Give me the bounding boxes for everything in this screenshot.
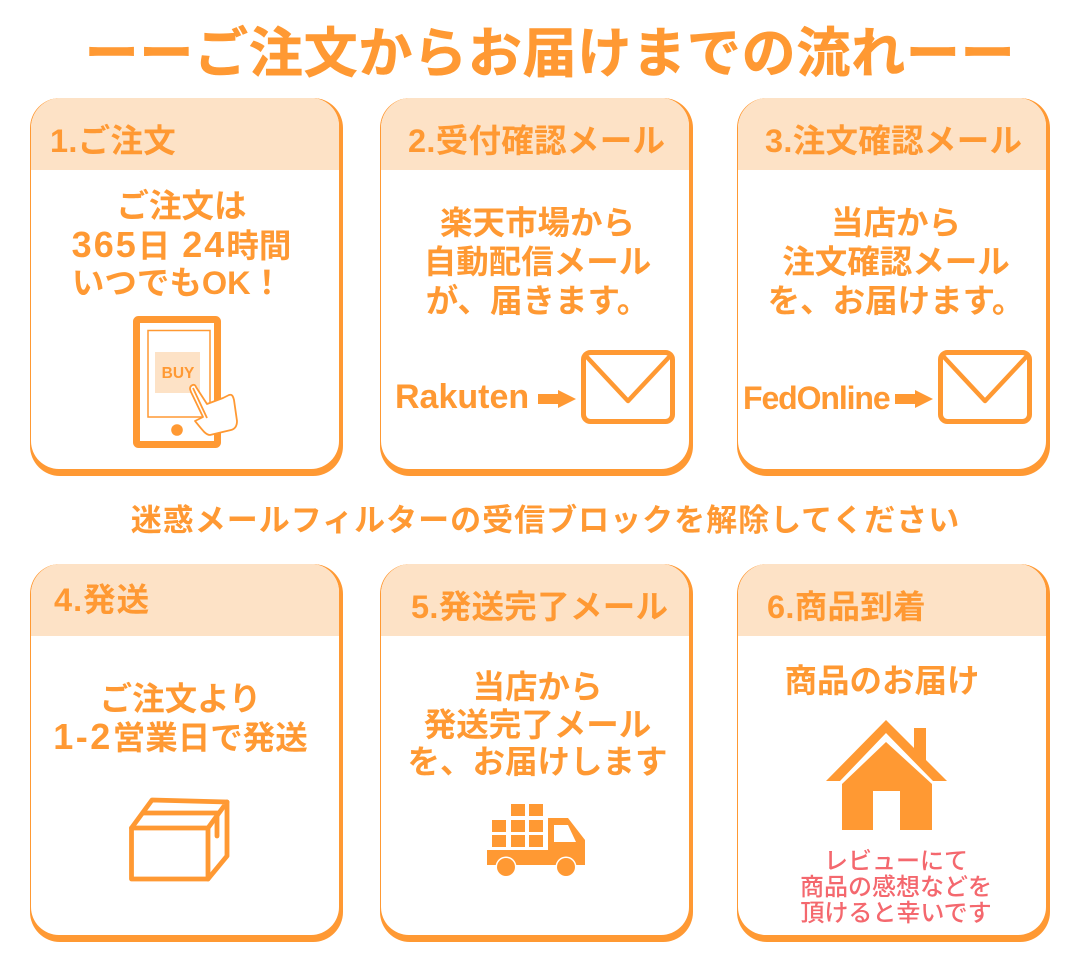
heading: step 3: 3.注文確認メール <box>765 123 1022 159</box>
text: order any time: いつでもOK！ <box>72 265 283 301</box>
text: review request: 商品の感想などを <box>800 874 992 901</box>
text: ships in 1-2 days: ご注文より <box>100 681 261 717</box>
text: shipment complete mail: 当店から <box>472 669 602 705</box>
icon: smartphone with hand: BUY <box>162 365 195 382</box>
text: order any time <box>72 188 291 301</box>
label: FedOnline: FedOnline <box>743 380 890 416</box>
title: ーーご注文からお届けまでの流れーー <box>85 24 1015 84</box>
text: review request: レビューにて <box>824 848 968 875</box>
icon: cardboard box <box>129 798 230 882</box>
notice: spam filter: 迷惑メールフィルターの受信ブロックを解除してください <box>131 503 960 538</box>
icon: smartphone with hand <box>133 316 238 448</box>
icon: house <box>826 720 947 830</box>
text: confirmation mail from shop <box>768 205 1024 319</box>
text: ships in 1-2 days <box>53 681 308 757</box>
arrow and envelope: FedOnline <box>895 350 1032 424</box>
text: automatic mail from Rakuten <box>424 205 651 319</box>
heading: step 6: 6.商品到着 <box>767 589 926 625</box>
panel: step 5 shipped mail <box>380 564 693 942</box>
text: review request: 頂けると幸いです <box>800 900 992 927</box>
panel: step 4 shipping <box>30 564 343 942</box>
panel: step 6 delivery <box>737 564 1050 942</box>
text: automatic mail from Rakuten: が、届きます。 <box>426 283 649 319</box>
text: automatic mail from Rakuten: 自動配信メール <box>424 244 651 280</box>
panel: step 2 receipt mail <box>380 98 693 476</box>
heading: step 2: 2.受付確認メール <box>408 123 665 159</box>
icon: delivery truck <box>487 804 585 876</box>
panel: step 3 order confirmation mail <box>737 98 1050 476</box>
heading: step 5: 5.発送完了メール <box>411 589 668 625</box>
text: shipment complete mail: 発送完了メール <box>424 706 651 742</box>
text: order any time: ご注文は <box>116 188 246 224</box>
text: shipment complete mail <box>407 669 668 780</box>
panel: step 1 order <box>30 98 343 476</box>
heading: step 1: 1.ご注文 <box>50 123 176 159</box>
text: ships in 1-2 days: 1-2営業日で発送 <box>53 716 308 757</box>
arrow and envelope: Rakuten <box>538 350 675 424</box>
text: shipment complete mail: を、お届けします <box>407 744 668 780</box>
label: Rakuten: Rakuten <box>395 378 529 416</box>
text: automatic mail from Rakuten: 楽天市場から <box>440 205 635 241</box>
text: confirmation mail from shop: を、お届けます。 <box>768 283 1024 319</box>
heading: step 4: 4.発送 <box>54 582 150 618</box>
text: confirmation mail from shop: 当店から <box>831 205 961 241</box>
text: review request <box>800 848 992 927</box>
text: confirmation mail from shop: 注文確認メール <box>782 244 1010 280</box>
text: order any time: 365日 24時間 <box>72 224 291 264</box>
text: product delivery: 商品のお届け <box>784 663 980 699</box>
